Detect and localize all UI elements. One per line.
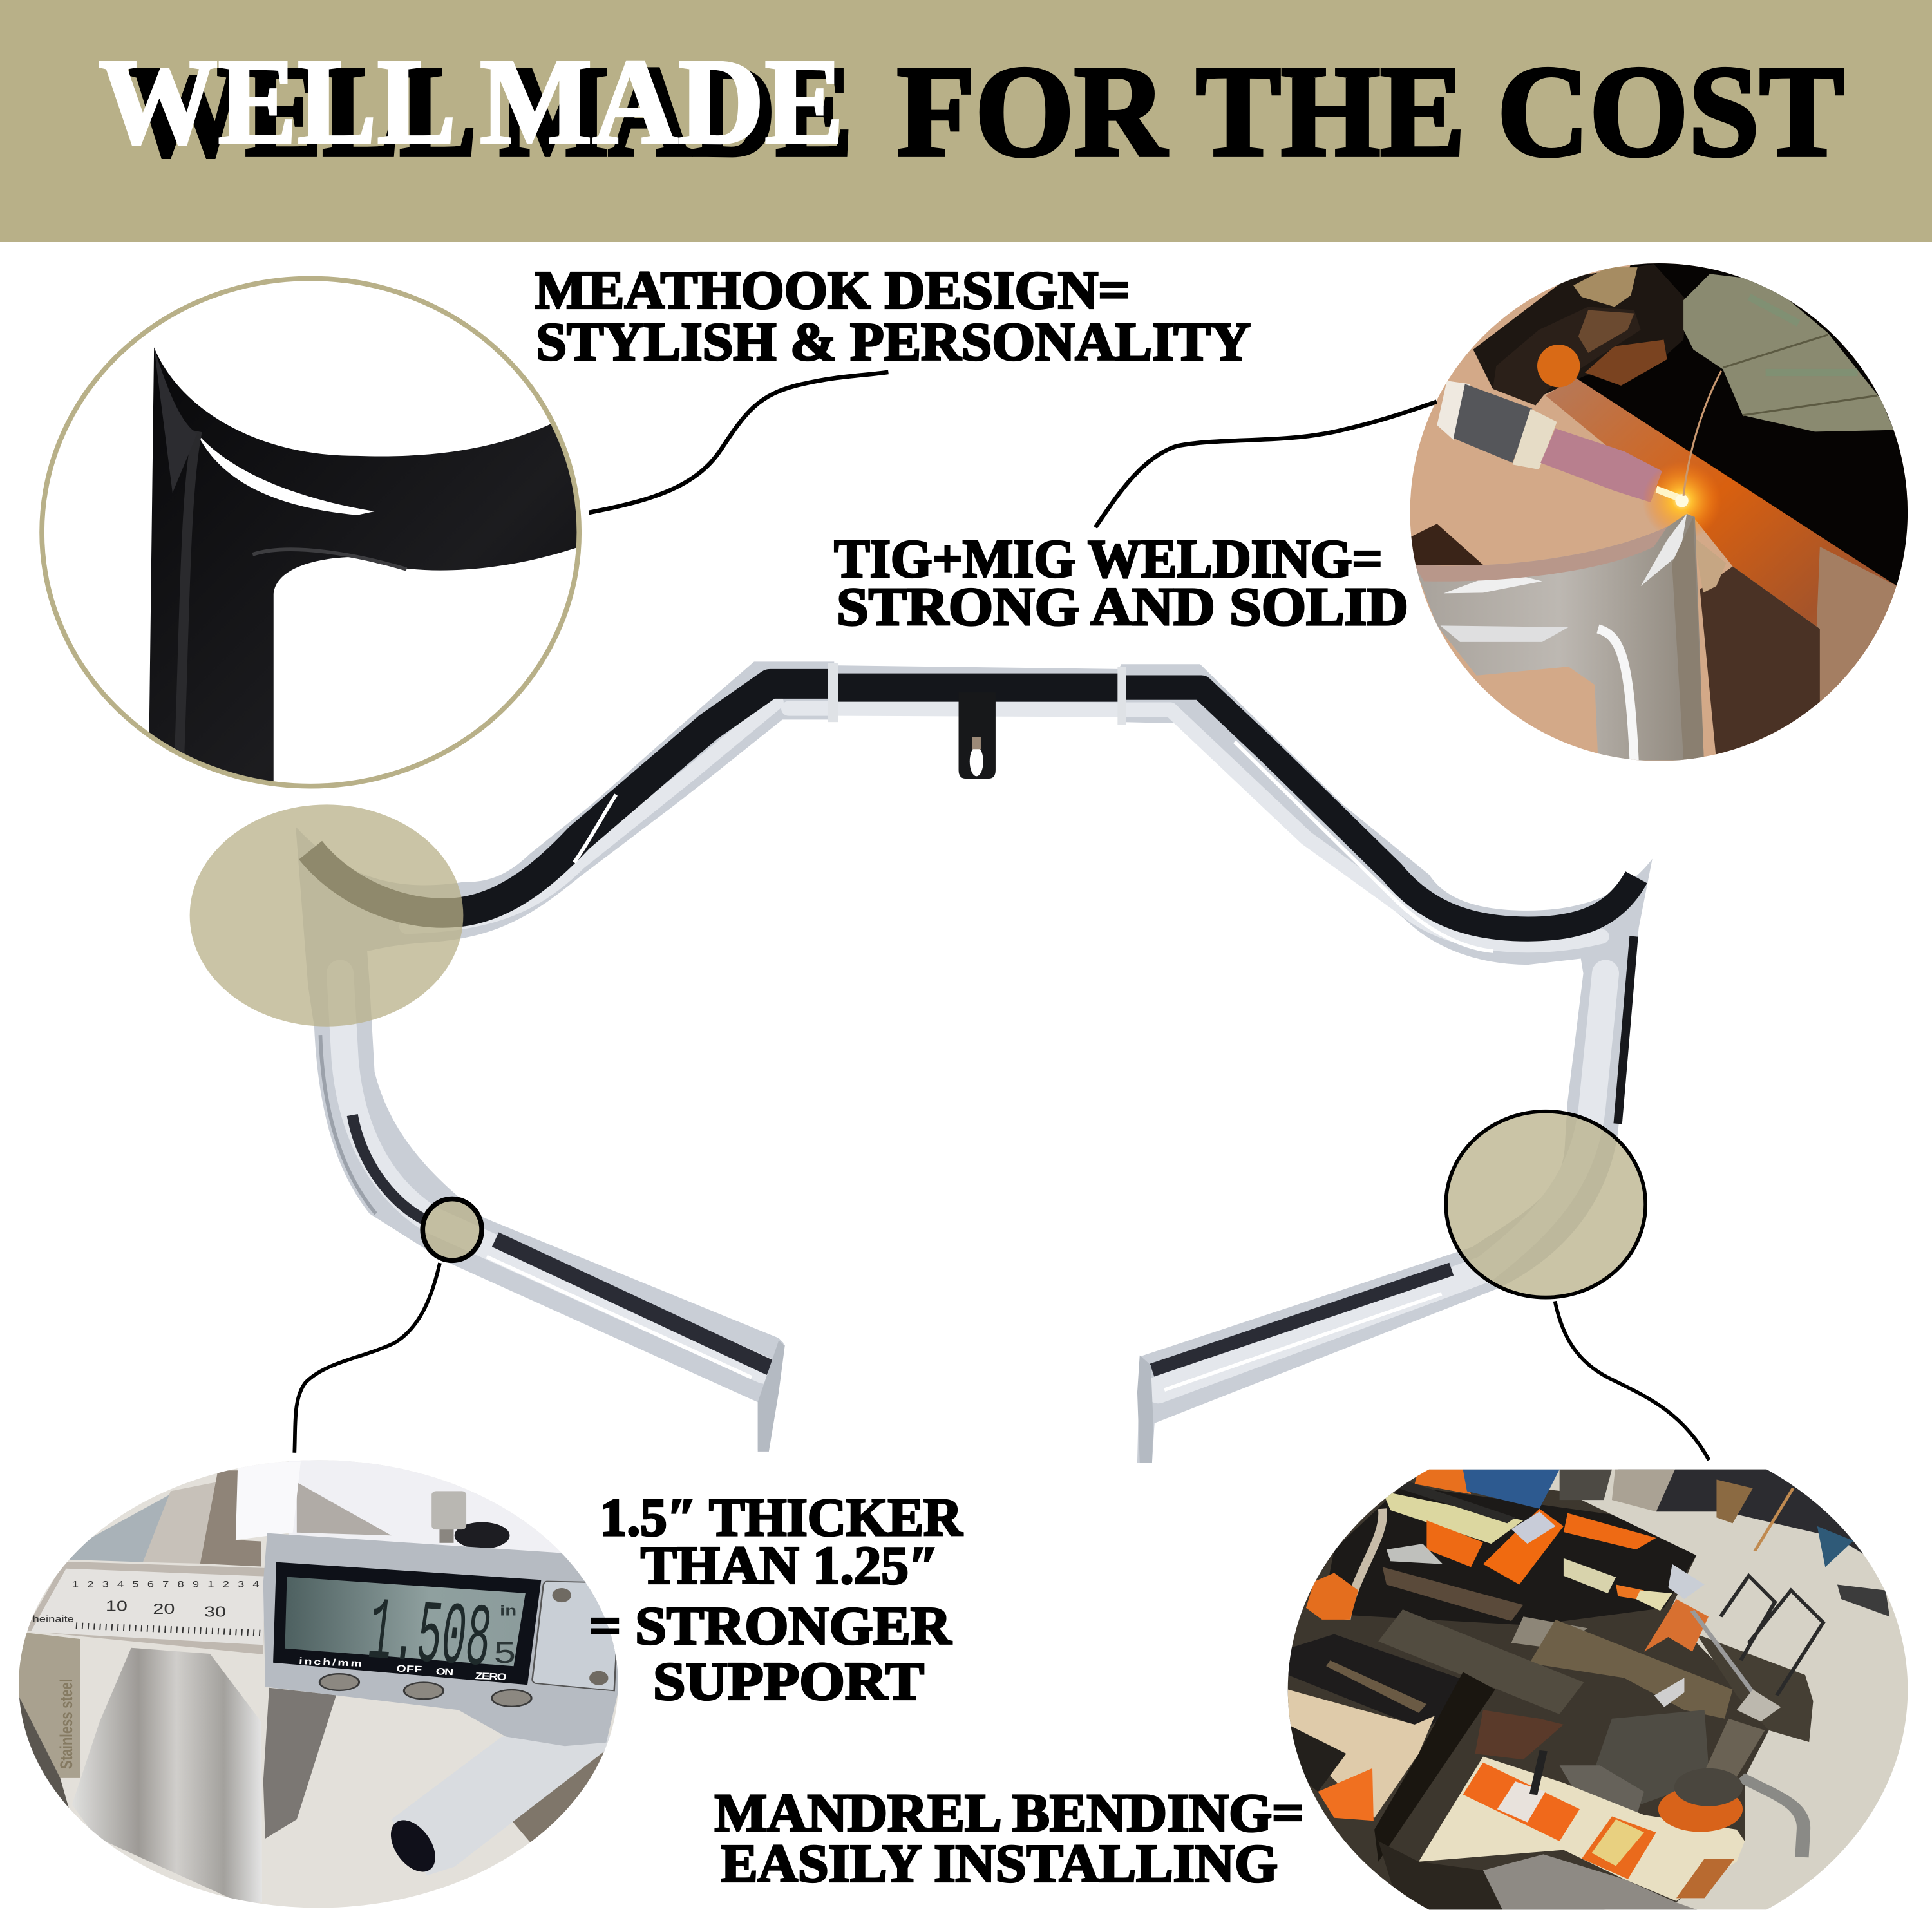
photo: rear dark torch area	[1473, 264, 1687, 395]
right panel	[533, 1581, 620, 1690]
panel: caliper photo	[13, 1455, 631, 1919]
photo: rag top	[1573, 267, 1638, 307]
right end plate	[1137, 1356, 1153, 1463]
photo: tan block	[1696, 539, 1726, 592]
text: mandrel bending: MANDREL BENDING=	[715, 1783, 1303, 1843]
ruler: 30	[204, 1604, 226, 1620]
text: thicker tube: 1.5″ THICKER	[600, 1488, 963, 1548]
heading: tig mig welding: STRONG AND SOLID	[837, 577, 1408, 637]
highlight: mandrel bend	[1446, 1112, 1645, 1298]
buttons	[319, 1674, 359, 1690]
lower jaw	[263, 1688, 336, 1839]
photo: bent dark corner	[1411, 524, 1483, 565]
middle rust block	[1475, 1710, 1564, 1759]
title: well made for the cost	[99, 34, 1844, 184]
panel: welding photo	[1404, 258, 1919, 773]
callout line: mandrel	[1555, 1301, 1709, 1460]
photo: torch collar	[1437, 381, 1470, 440]
photo: chrome T weld	[1414, 514, 1704, 761]
thumbscrew	[431, 1491, 466, 1530]
wire frames	[1721, 1576, 1823, 1696]
caliper labels: inch/mm	[299, 1655, 363, 1669]
bent tube	[1741, 1777, 1804, 1857]
bar dark reflections	[310, 684, 1636, 929]
photo: dark background	[1575, 258, 1919, 600]
photo: shadow on table	[1700, 567, 1820, 761]
ruler	[24, 1562, 265, 1654]
rags	[1346, 1509, 1383, 1620]
bottom floor	[1378, 1841, 1507, 1919]
text: mandrel bending: EASILY INSTALLING	[721, 1834, 1278, 1894]
heading: meathook design: STYLISH & PERSONALITY	[536, 312, 1251, 372]
panel: mandrel bending machine photo	[1282, 1462, 1913, 1919]
small tube	[513, 1750, 605, 1842]
rack of bars	[1696, 1634, 1813, 1742]
bar silhouette	[296, 661, 1653, 1463]
heading: tig mig welding	[834, 529, 1408, 637]
photo base: table	[1404, 258, 1919, 773]
heading: tig mig welding: TIG+MIG WELDING=	[834, 529, 1383, 589]
ruler: 20	[153, 1601, 175, 1617]
die	[1658, 1786, 1743, 1832]
mounting tab	[959, 692, 996, 779]
highlight: meathook area	[190, 804, 463, 1027]
tooling	[1596, 1710, 1709, 1806]
panel: caliper photo: Stainless steel	[57, 1679, 77, 1769]
floor	[13, 1455, 631, 1919]
photo: green glove	[1683, 274, 1894, 431]
text: thicker tube: SUPPORT	[653, 1651, 924, 1711]
upper machines	[1322, 1486, 1696, 1625]
ruler: 1 2 3 4 5 6 7 8 9 1 2 3 4	[72, 1580, 260, 1589]
big tube	[72, 1648, 262, 1905]
panel: caliper photo: OFF	[396, 1663, 422, 1674]
panel: caliper photo: 5	[494, 1636, 516, 1669]
callout line: meathook	[589, 372, 888, 513]
caliper body	[263, 1533, 618, 1746]
panel: caliper photo: in	[500, 1602, 516, 1618]
callout line: thickness	[294, 1263, 440, 1453]
text: thicker tube: = STRONGER	[589, 1596, 952, 1656]
panel: caliper photo: ON	[435, 1666, 454, 1678]
post	[1705, 1719, 1765, 1777]
header band	[0, 0, 1932, 242]
left dark bed	[1288, 1634, 1475, 1730]
photo: pink nozzle	[1540, 428, 1662, 502]
photo: rust steel strip	[1546, 377, 1919, 717]
text: mandrel bending	[715, 1783, 1303, 1894]
central brown plate	[1530, 1620, 1732, 1719]
collars	[828, 663, 1126, 724]
ruler: 10	[106, 1598, 128, 1614]
floor	[1282, 1462, 1913, 1919]
panel: caliper photo: 1.508	[363, 1583, 496, 1691]
bar chrome core	[340, 703, 1605, 1390]
cream front	[1419, 1757, 1745, 1901]
orange warning panels	[1463, 1763, 1580, 1841]
heading: meathook design: MEATHOOK DESIGN=	[535, 260, 1130, 320]
photo: torch head	[1493, 307, 1641, 405]
photo: lit plate	[1814, 547, 1897, 707]
title: well made for the cost: WELL MADE	[99, 34, 844, 170]
ruler: heinaite	[33, 1615, 74, 1624]
photo: arc flame	[1645, 466, 1716, 536]
background	[289, 1461, 562, 1553]
title: well made for the cost: FOR THE COST	[897, 39, 1844, 184]
screen	[273, 1562, 541, 1685]
product: crash bar	[296, 661, 1653, 1463]
panel: caliper photo: ZERO	[475, 1670, 507, 1682]
factory back	[1612, 1462, 1913, 1584]
long cylinder	[1390, 1625, 1571, 1698]
panel: meathook close-up photo	[42, 278, 585, 795]
stainless label	[17, 1632, 80, 1778]
callout line: welding	[1095, 402, 1437, 527]
bar highlights	[487, 742, 1493, 1390]
heading: meathook design	[535, 260, 1251, 372]
text: thicker tube: THAN 1.25″	[641, 1536, 939, 1596]
left end plate	[758, 1341, 785, 1452]
cream left housing	[1288, 1690, 1435, 1818]
machine mass	[1282, 1473, 1769, 1919]
highlight: small weld ring	[422, 1199, 482, 1260]
text: thicker tube	[589, 1488, 963, 1711]
title: well made for the cost: WELL MADE	[129, 39, 853, 184]
